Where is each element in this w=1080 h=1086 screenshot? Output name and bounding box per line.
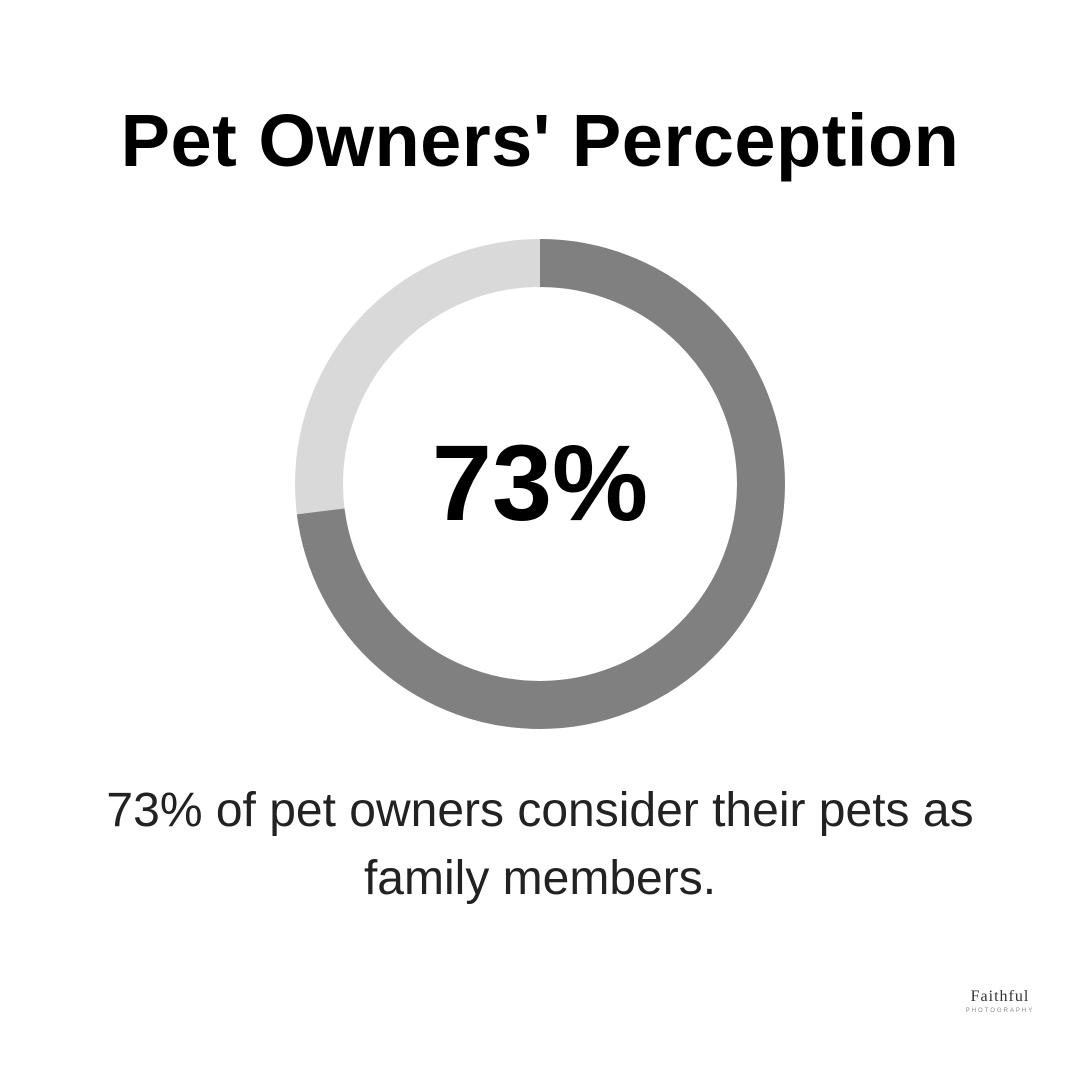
logo <box>966 988 1034 1014</box>
description text: family members. <box>364 852 716 905</box>
logo: PHOTOGRAPHY <box>966 1008 1034 1014</box>
description text <box>106 784 974 905</box>
description text: 73% of pet owners consider their pets as <box>106 784 974 837</box>
title: Pet Owners' Perception <box>121 99 959 182</box>
logo: Faithful <box>971 988 1029 1005</box>
donut chart: 73% <box>432 422 648 543</box>
